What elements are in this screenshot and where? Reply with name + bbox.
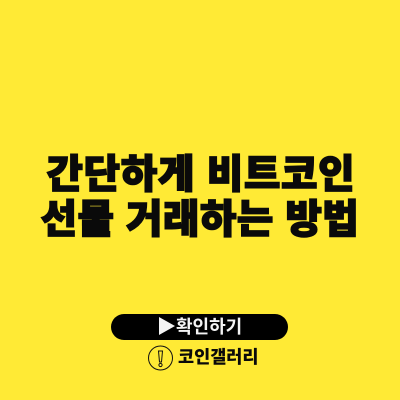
icon: exclamation circle: [148, 346, 173, 370]
title: 선물 거래하는 방법: [41, 198, 359, 242]
title: [40, 153, 359, 242]
icon: play triangle: [159, 317, 175, 335]
button label: 확인하기: [176, 317, 242, 337]
button: confirm: [111, 314, 288, 340]
title: 간단하게 비트코인: [47, 153, 355, 197]
brand name: 코인갤러리: [178, 347, 258, 367]
brand row: [148, 346, 258, 370]
